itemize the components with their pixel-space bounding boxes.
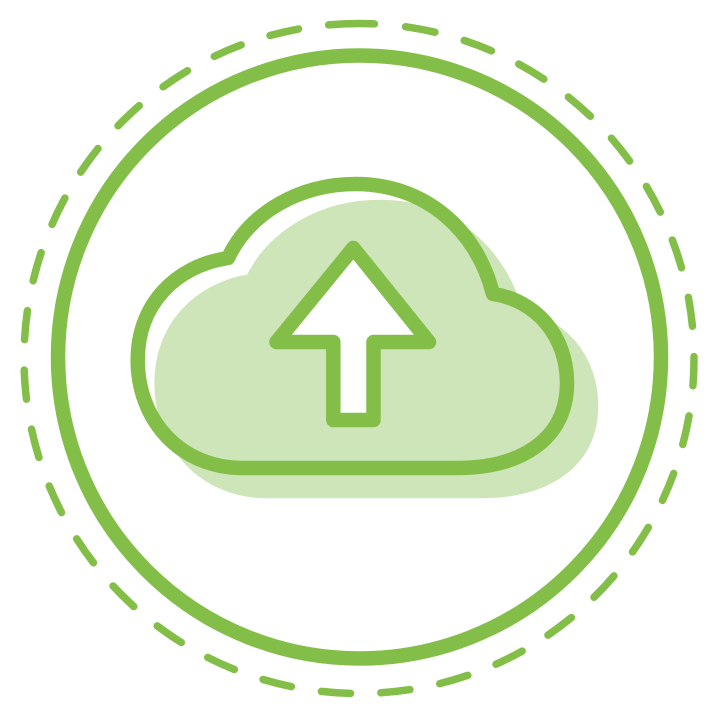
cloud shadow xyxy=(162,207,591,491)
upload arrow xyxy=(276,248,429,420)
cloud outline xyxy=(138,184,567,468)
solid inner ring xyxy=(58,56,661,658)
